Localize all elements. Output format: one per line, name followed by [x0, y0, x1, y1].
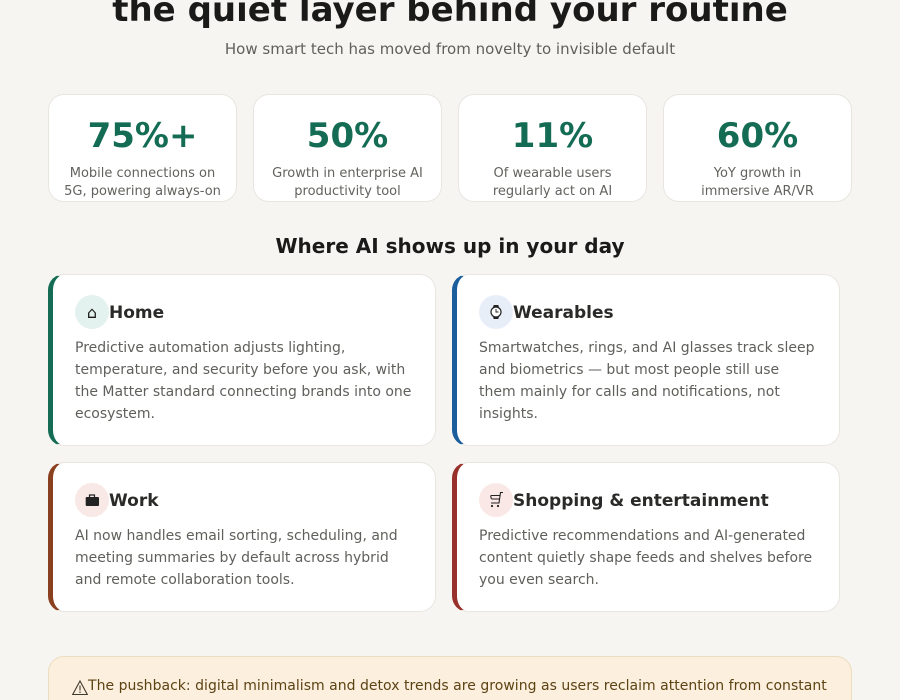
- stat value: 11%: [512, 116, 593, 156]
- heading: home: Home: [109, 303, 164, 323]
- stat label: [493, 166, 612, 199]
- callout: the pushback: [48, 656, 852, 700]
- text: shopping and entertainment: content quietly shape feeds and shelves before: [479, 550, 812, 566]
- stat card: 75%+: [48, 94, 237, 202]
- panel: home: [48, 274, 436, 446]
- text: wearables: and biometrics — but most people still use: [479, 362, 779, 378]
- stat label: Mobile connections on: [70, 166, 215, 181]
- text: work: and remote collaboration tools.: [75, 572, 295, 588]
- heading: wearables: Wearables: [513, 303, 614, 323]
- stat label: [64, 166, 221, 199]
- stat label: [701, 166, 814, 199]
- heading: shopping and entertainment: Shopping & entertainment: [513, 491, 769, 511]
- stat card: 50%: [253, 94, 442, 202]
- stat label: 5G, powering always-on: [64, 184, 221, 199]
- text: wearables: Smartwatches, rings, and AI glasses track sleep: [479, 340, 814, 356]
- text: wearables: them mainly for calls and notifications, not: [479, 384, 780, 400]
- text: work: AI now handles email sorting, scheduling, and: [75, 528, 398, 544]
- stat label: Of wearable users: [494, 166, 611, 181]
- panel: shopping and entertainment: [452, 462, 840, 612]
- subtitle: How smart tech has moved from novelty to invisible default: [225, 40, 675, 58]
- text: home: Predictive automation adjusts lighting,: [75, 340, 345, 356]
- icon: home: [75, 295, 109, 329]
- text: wearables: insights.: [479, 406, 538, 422]
- heading: work: Work: [109, 491, 159, 511]
- section heading: Where AI shows up in your day: [275, 234, 624, 258]
- stat card: 60%: [663, 94, 852, 202]
- icon: briefcase: [75, 483, 109, 517]
- stat label: [272, 166, 423, 199]
- callout text: The pushback: digital minimalism and detox trends are growing as users reclaim attention from constant: [88, 678, 827, 694]
- stat value: 75%+: [88, 116, 197, 156]
- stat label: immersive AR/VR: [701, 184, 814, 199]
- text: shopping and entertainment: you even search.: [479, 572, 599, 588]
- icon: warning: [72, 680, 88, 695]
- stat label: YoY growth in: [714, 166, 801, 181]
- icon: cart: [479, 483, 513, 517]
- text: home: temperature, and security before you ask, with: [75, 362, 405, 378]
- text: shopping and entertainment: [479, 528, 812, 588]
- stat value: 50%: [307, 116, 388, 156]
- text: home: [75, 340, 411, 422]
- text: work: meeting summaries by default across hybrid: [75, 550, 389, 566]
- panel: wearables: [452, 274, 840, 446]
- stat label: productivity tool: [294, 184, 401, 199]
- text: shopping and entertainment: Predictive recommendations and AI-generated: [479, 528, 805, 544]
- text: home: the Matter standard connecting brands into one: [75, 384, 411, 400]
- stat card: 11%: [458, 94, 647, 202]
- icon: home: ⌂: [87, 303, 97, 322]
- stat value: 60%: [717, 116, 798, 156]
- text: wearables: [479, 340, 814, 422]
- stat label: Growth in enterprise AI: [272, 166, 423, 181]
- text: home: ecosystem.: [75, 406, 155, 422]
- icon: watch: [479, 295, 513, 329]
- panel: work: [48, 462, 436, 612]
- text: work: [75, 528, 398, 588]
- stat label: regularly act on AI: [493, 184, 612, 199]
